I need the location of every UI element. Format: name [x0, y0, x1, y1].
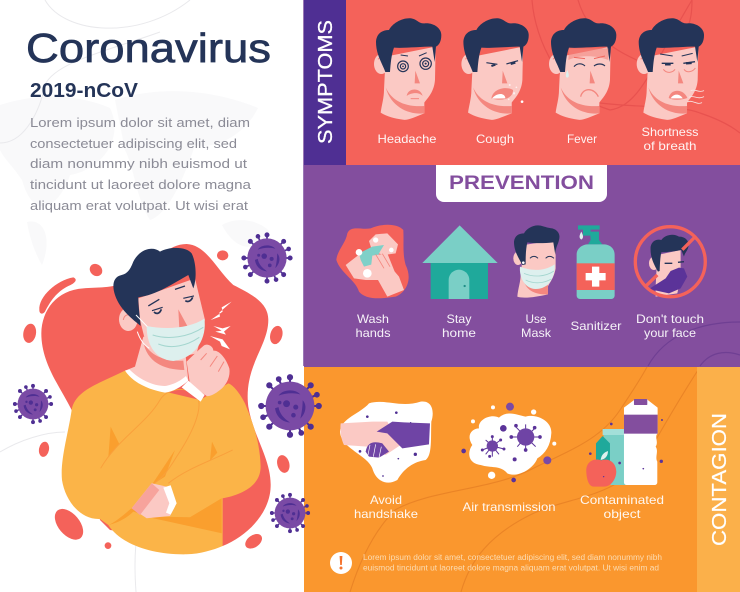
- sweater folds: [108, 427, 222, 533]
- raised hand: [187, 345, 230, 396]
- prevention heading: [436, 165, 607, 202]
- prevention labels: home: [442, 326, 476, 340]
- intro text: Lorem ipsum dolor sit amet, diam: [30, 115, 250, 130]
- illustration: coughing man: [22, 244, 291, 554]
- symptoms sidebar: [304, 0, 346, 165]
- lower cuff: [163, 485, 177, 515]
- prevention heading: PREVENTION: [449, 173, 594, 194]
- panel: prevention: [304, 165, 740, 367]
- prevention labels: Stay: [446, 312, 472, 326]
- virus large center: [259, 375, 321, 437]
- prevention labels: Use: [526, 312, 547, 326]
- left panel background: [0, 0, 304, 592]
- mask: [147, 319, 205, 361]
- icon: don't touch face: [635, 227, 705, 297]
- eyes: [148, 286, 194, 313]
- contagion labels: [354, 493, 664, 521]
- lower hand: [132, 483, 175, 518]
- hair: [113, 248, 196, 326]
- contagion labels: Avoid: [370, 493, 402, 507]
- pain lightning: [210, 302, 232, 349]
- intro text: aliquam erat volutpat. Ut wisi erat: [30, 198, 248, 213]
- symptom labels: [378, 125, 698, 153]
- symptom labels: of breath: [644, 139, 696, 153]
- contagion sidebar: CONTAGION: [709, 413, 731, 546]
- panel: symptoms: [304, 0, 740, 165]
- red blob: [41, 244, 271, 546]
- virus left: [14, 385, 52, 423]
- symptom labels: Fever: [567, 132, 597, 146]
- contagion labels: handshake: [354, 507, 418, 521]
- nose: [178, 309, 189, 328]
- contagion sidebar: [697, 367, 740, 592]
- decorative dots: [22, 250, 291, 552]
- prevention labels: Don't touch: [636, 312, 704, 326]
- intro text: tincidunt ut laoreet dolore magna: [30, 177, 252, 192]
- symptom: fever: [549, 18, 616, 120]
- icon: wash hands: [336, 225, 409, 298]
- symptoms sidebar: SYMPTOMS: [315, 20, 337, 144]
- symptom labels: Headache: [378, 132, 437, 146]
- prevention labels: hands: [356, 326, 390, 340]
- prevention labels: Wash: [357, 312, 389, 326]
- prevention labels: Mask: [521, 326, 552, 340]
- sweater: [62, 371, 261, 554]
- icon: avoid handshake: [340, 402, 433, 483]
- prevention labels: your face: [644, 326, 696, 340]
- prevention labels: Sanitizer: [570, 319, 622, 333]
- virus top right: [242, 233, 292, 283]
- head: [138, 278, 205, 360]
- prevention labels: [356, 312, 704, 340]
- footer note: Lorem ipsum dolor sit amet, consectetuer adipiscing elit, sed diam nonummy nibh: [363, 553, 662, 562]
- symptom: shortness of breath: [637, 18, 704, 120]
- intro text: [30, 115, 252, 213]
- world map watermark: [0, 91, 270, 265]
- icon: house: [422, 225, 498, 299]
- raised cuff: [182, 381, 205, 402]
- symptom: headache: [374, 18, 441, 120]
- intro text: consectetuer adipiscing elit, sed: [30, 136, 237, 151]
- collar: [125, 369, 188, 393]
- icon: mask face: [513, 225, 559, 298]
- symptom: cough: [461, 18, 529, 120]
- subtitle: 2019-nCoV: [30, 80, 139, 102]
- icon: contaminated object: [586, 399, 663, 487]
- panel: contagion: [304, 367, 740, 592]
- icon: warning: [330, 552, 352, 574]
- symptom labels: Cough: [476, 132, 514, 146]
- icon: sanitizer: [577, 225, 615, 299]
- symptom labels: Shortness: [642, 125, 698, 139]
- footer note: [363, 553, 662, 572]
- intro text: diam nonummy nibh euismod ut: [30, 156, 247, 171]
- title: Coronavirus: [26, 25, 271, 71]
- virus bottom: [271, 494, 309, 532]
- contagion labels: Contaminated: [580, 493, 664, 507]
- contagion labels: object: [604, 507, 641, 521]
- divider line: [302, 0, 304, 366]
- icon: air transmission: [461, 403, 556, 482]
- neck: [125, 337, 188, 392]
- footer note: euismod tincidunt ut laoreet dolore magna aliquam erat volutpat. Ut wisi enim ad: [363, 564, 659, 572]
- background curves: [0, 0, 190, 592]
- contagion labels: Air transmission: [462, 500, 556, 514]
